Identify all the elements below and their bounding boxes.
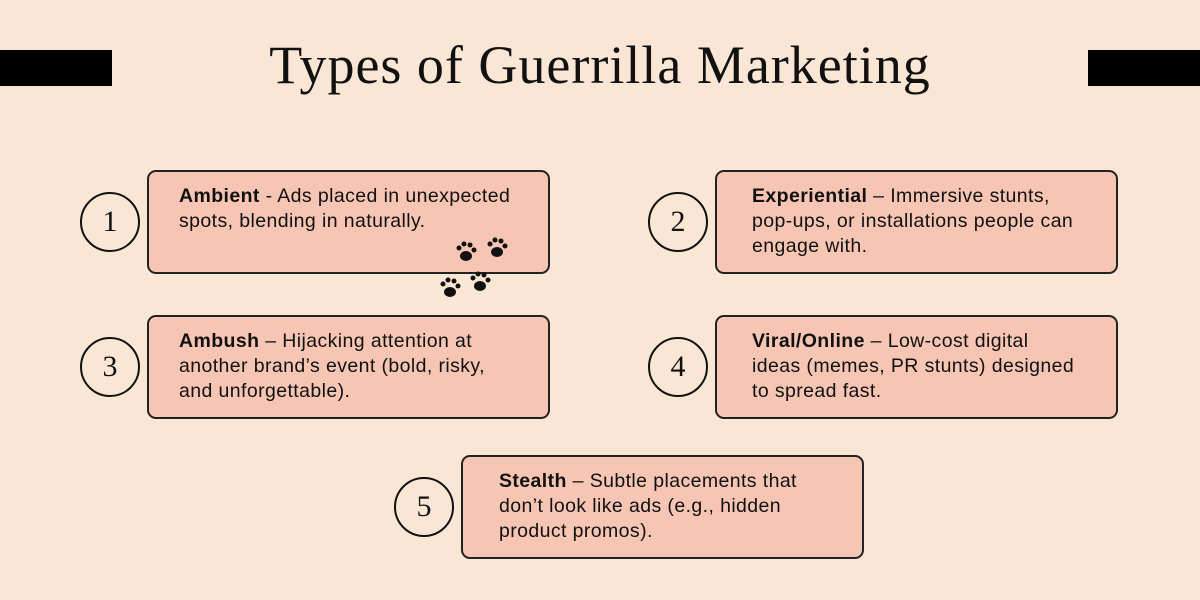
panel: ambush: and unforgettable). [179, 380, 350, 402]
panel: stealth [461, 455, 864, 559]
panel: stealth: product promos). [499, 520, 653, 542]
number 3: 3 [102, 350, 118, 383]
panel: ambush: another brand’s event (bold, risky, [179, 355, 485, 377]
number 4: 4 [670, 350, 686, 383]
number 2 [648, 192, 708, 252]
panel: stealth: don’t look like ads (e.g., hidden [499, 495, 781, 517]
panel: experiential [715, 170, 1118, 274]
panel: experiential: pop-ups, or installations people can [752, 210, 1073, 232]
number 1 [80, 192, 140, 252]
panel: viral/online: to spread fast. [752, 380, 882, 402]
number 3 [80, 337, 140, 397]
title: Types of Guerrilla Marketing [269, 35, 931, 95]
number 2: 2 [670, 205, 686, 238]
panel: viral/online: ideas (memes, PR stunts) designed [752, 355, 1074, 377]
decorative tape: left [0, 50, 112, 86]
panel: viral/online: Viral/Online – Low-cost digital [752, 330, 1028, 352]
panel: ambush [147, 315, 550, 419]
icon: paw prints [440, 238, 508, 297]
panel: ambient: Ambient - Ads placed in unexpected [179, 185, 510, 207]
panel: ambient: spots, blending in naturally. [179, 210, 425, 232]
panel: ambient [147, 170, 550, 274]
number 4 [648, 337, 708, 397]
number 5 [394, 477, 454, 537]
panel: experiential: Experiential – Immersive stunts, [752, 185, 1050, 207]
number 5: 5 [416, 490, 432, 523]
number 1: 1 [102, 205, 118, 238]
panel: viral/online [715, 315, 1118, 419]
panel: stealth: Stealth – Subtle placements that [499, 470, 797, 492]
decorative tape: right [1088, 50, 1200, 86]
panel: ambush: Ambush – Hijacking attention at [179, 330, 472, 352]
panel: experiential: engage with. [752, 235, 867, 257]
